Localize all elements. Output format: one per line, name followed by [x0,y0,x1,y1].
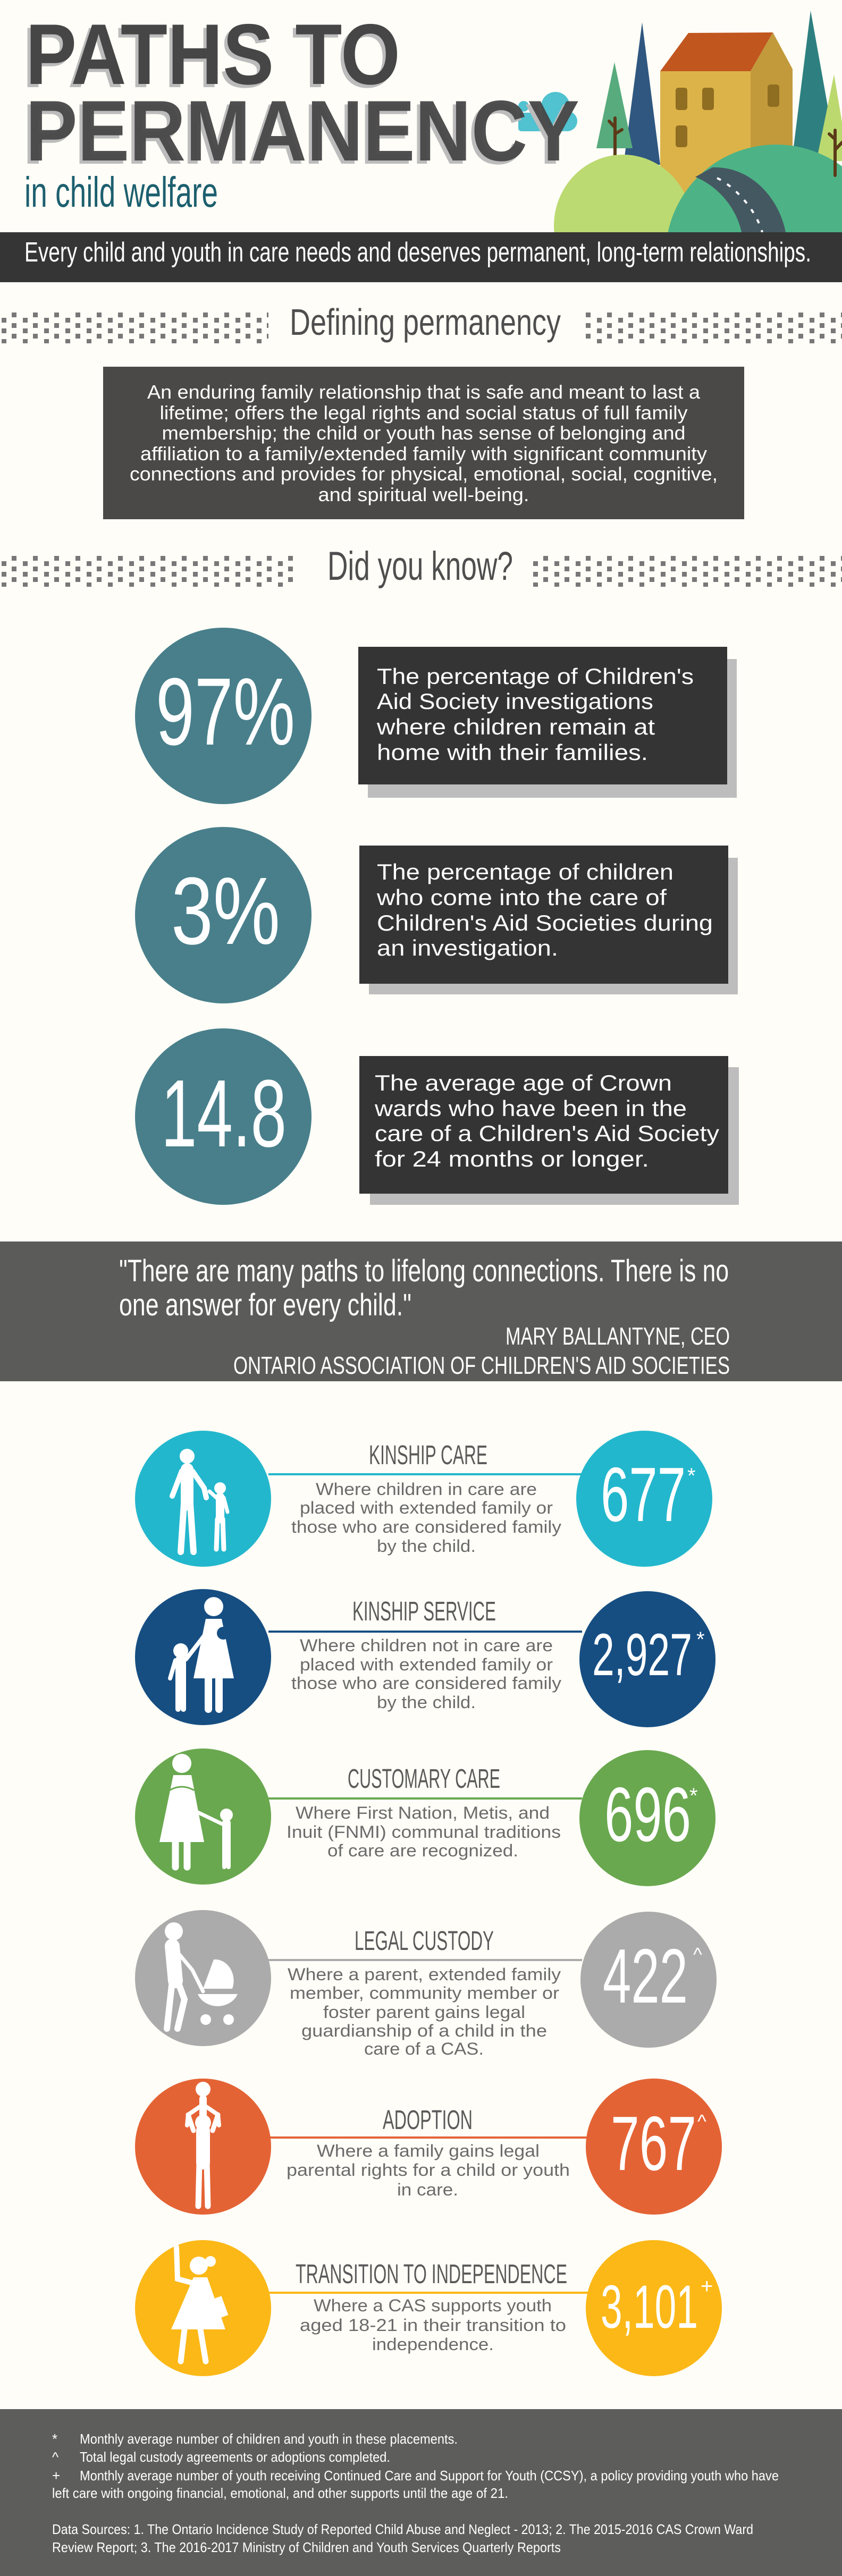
icon: adult and child [172,1449,228,1552]
footer: notes and data sources: Data Sources: 1. The Ontario Incidence Study of Reported Child Abuse and Neglect - 2013; 2. The 2015-2016 CAS Crown Ward [52,2521,753,2537]
footer: notes and data sources: Total legal custody agreements or adoptions completed. [80,2449,390,2465]
footer: notes and data sources: * [52,2431,57,2447]
heading: Did you know?: Did you know? [327,544,513,589]
stat: 97%: home with their families. [377,740,648,765]
definition box [103,367,744,519]
definition box: connections and provides for physical, emotional, social, cognitive, [130,463,718,485]
stat: 14.8: for 24 months or longer. [375,1146,649,1171]
path: legal custody [135,1910,717,2058]
path: customary care: 696 [604,1771,691,1857]
path: kinship care: 677 [601,1451,686,1538]
path: adoption: ^ [697,2110,706,2132]
path: customary care: Inuit (FNMI) communal traditions [287,1822,561,1842]
title: PATHS TO [26,6,400,103]
heading: Did you know? [0,544,842,589]
stat: 3%: 3% [171,858,280,965]
icon: woman with baby and child [170,1597,234,1709]
path: transition to independence: independence. [372,2335,494,2354]
path: kinship care: placed with extended family or [300,1498,553,1517]
path: transition to independence: TRANSITION TO INDEPENDENCE [296,2259,567,2289]
path: adoption: Where a family gains legal [317,2141,540,2160]
stat: 3%: who come into the care of [376,885,667,910]
path: legal custody: ^ [693,1944,702,1965]
path: legal custody: guardianship of a child in the [301,2021,547,2040]
path: kinship care: KINSHIP CARE [369,1440,487,1470]
path: adoption: in care. [397,2180,458,2199]
footer: notes and data sources [0,2409,842,2576]
path: legal custody: LEGAL CUSTODY [355,1925,494,1956]
stat: 3% [135,827,738,1003]
heading: Defining permanency [0,301,842,343]
stat: 97%: Aid Society investigations [377,689,653,714]
banner: key message [0,232,842,282]
path: transition to independence: Where a CAS supports youth [314,2296,552,2315]
path: customary care: Where First Nation, Metis, and [296,1803,550,1822]
path: kinship service: * [696,1628,705,1651]
stat: 97%: where children remain at [376,714,655,739]
title [22,6,579,182]
stat: 97%: The percentage of Children's [377,664,694,689]
icon: girl waving with bag [171,2247,228,2361]
path: adoption: parental rights for a child or youth [287,2160,570,2180]
path: legal custody: foster parent gains legal [323,2003,525,2022]
path: kinship service: placed with extended family or [300,1655,553,1674]
stat: 3%: an investigation. [377,935,558,960]
path: kinship service: by the child. [377,1693,476,1712]
path: transition to independence: + [701,2275,713,2298]
path: kinship service: KINSHIP SERVICE [352,1596,496,1626]
path: transition to independence [135,2240,722,2376]
path: kinship care: those who are considered family [291,1517,561,1536]
stat: 97% [135,628,737,804]
stat: 14.8 [135,1028,739,1205]
stat: 14.8: 14.8 [161,1060,287,1167]
definition box: membership; the child or youth has sense of belonging and [162,422,686,444]
quote band: one answer for every child." [119,1288,411,1322]
icon: cloud behind Y [518,92,577,131]
heading: Defining permanency: Defining permanency [290,301,561,343]
stat: 14.8: wards who have been in the [374,1096,687,1121]
quote band: MARY BALLANTYNE, CEO [506,1322,730,1350]
path: adoption: ADOPTION [383,2105,473,2135]
footer: notes and data sources: + [52,2468,60,2484]
subtitle: in child welfare [24,168,218,216]
path: kinship service [135,1589,715,1727]
path: customary care: CUSTOMARY CARE [348,1763,500,1794]
path: kinship care: Where children in care are [316,1480,537,1499]
illustration: houses and hills [554,11,842,232]
definition box: lifetime; offers the legal rights and social status of full family [159,402,688,424]
stat: 14.8: The average age of Crown [375,1070,672,1095]
footer: notes and data sources: Monthly average number of youth receiving Continued Care and Support for Youth (CCSY), a policy providing youth who have [80,2468,779,2484]
path: transition to independence: 3,101 [601,2273,698,2341]
stat: 97%: 97% [156,658,295,765]
path: kinship service: those who are considered family [291,1674,561,1693]
icon: parent with stroller [165,1922,238,2029]
title: PERMANENCY [26,83,579,179]
definition box: affiliation to a family/extended family with significant community [140,443,707,464]
path: kinship service: 2,927 [592,1621,692,1688]
stat: 3%: Children's Aid Societies during [377,910,713,935]
definition box: An enduring family relationship that is safe and meant to last a [147,381,701,403]
quote band [0,1241,842,1381]
footer: notes and data sources: left care with ongoing financial, emotional, and other supports until the age of 21. [52,2485,508,2501]
path: customary care: of care are recognized. [327,1841,518,1860]
icon: woman in dress and child [159,1754,233,1867]
path: customary care [135,1749,715,1886]
path: legal custody: Where a parent, extended family [288,1965,561,1984]
path: adoption: 767 [611,2100,696,2186]
title: PERMANENCY [22,86,576,182]
path: kinship care [135,1431,712,1567]
footer: notes and data sources: Review Report; 3. The 2016-2017 Ministry of Children and Youth Services Quarterly Reports [52,2539,561,2555]
footer: notes and data sources: ^ [52,2449,59,2465]
definition box: and spiritual well-being. [318,484,529,505]
stat: 14.8: care of a Children's Aid Society [375,1121,719,1146]
path: kinship care: by the child. [377,1536,476,1556]
path: legal custody: care of a CAS. [364,2039,484,2058]
icon: adult carrying child on shoulders [187,2082,219,2206]
title: PATHS TO [22,10,397,106]
path: kinship care: * [687,1464,696,1488]
path: kinship service: Where children not in care are [300,1636,553,1655]
path: customary care: * [689,1784,698,1808]
path: transition to independence: aged 18-21 in their transition to [300,2316,566,2335]
stat: 3%: The percentage of children [377,859,673,884]
path: legal custody: 422 [603,1933,688,2019]
footer: notes and data sources: Monthly average number of children and youth in these placements. [80,2431,458,2447]
path: legal custody: member, community member or [290,1983,559,2003]
path: adoption [135,2079,722,2215]
